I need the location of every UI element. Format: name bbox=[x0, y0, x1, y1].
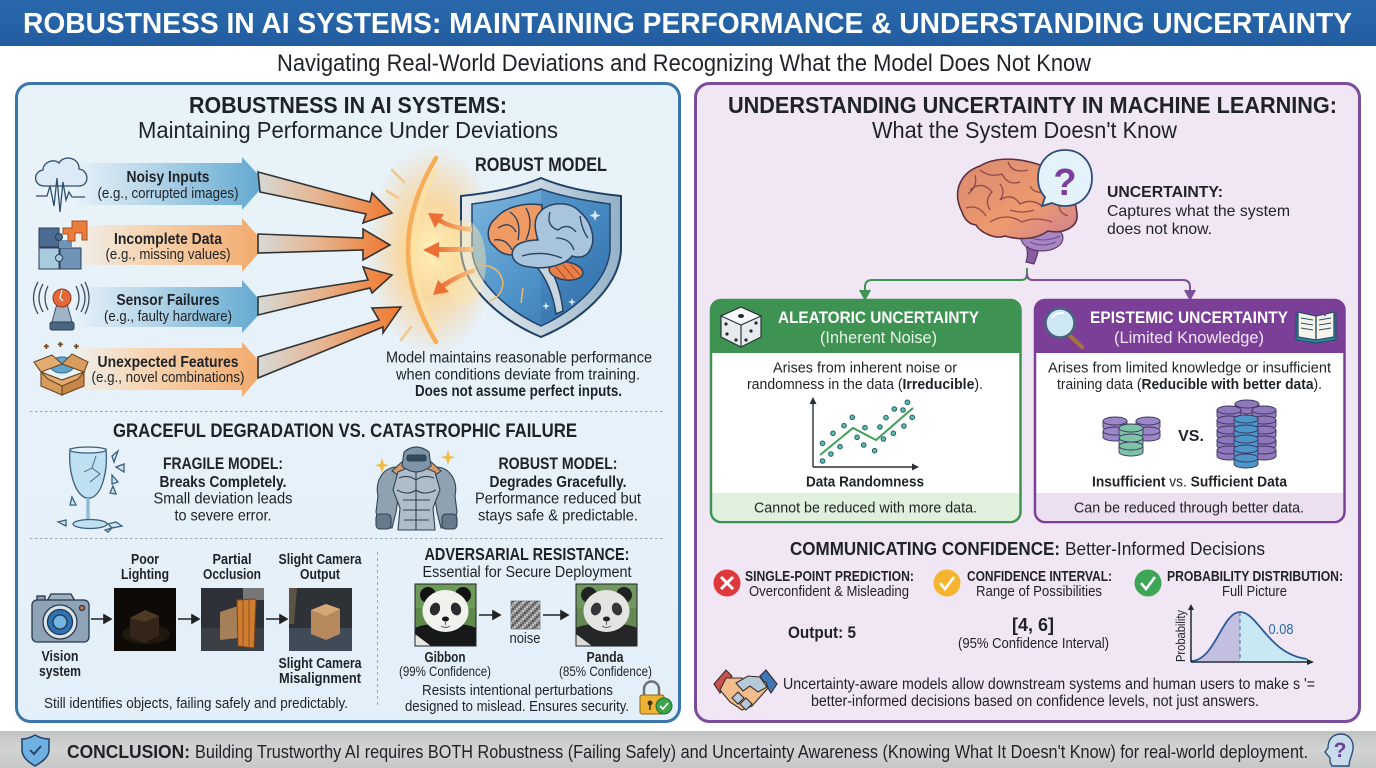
card heading: epistemic: (Limited Knowledge) bbox=[1114, 328, 1264, 347]
text: uncertainty-aware models: Uncertainty-aware models allow downstream systems and human users to make s '= bbox=[783, 676, 1315, 693]
arrow: noisy inputs bbox=[75, 157, 266, 210]
label: vs: VS. bbox=[1178, 428, 1204, 445]
image: poor lighting bbox=[114, 588, 176, 651]
labels: scenario headings: Output bbox=[300, 567, 340, 583]
text: identifies objects: Still identifies objects, failing safely and predictably. bbox=[44, 695, 348, 712]
arrow: unexpected features: Unexpected Features bbox=[98, 354, 238, 371]
glow overlap bbox=[442, 220, 486, 304]
chart: probability distribution bbox=[1173, 604, 1314, 665]
icon: open box: + bbox=[44, 342, 49, 351]
arrow: deviation into shield 2 bbox=[258, 229, 390, 260]
footer: conclusion bbox=[0, 731, 1376, 768]
arrow: deviation into shield 3 bbox=[258, 267, 392, 315]
text: resists perturbations bbox=[405, 683, 629, 715]
icon: dice bbox=[721, 307, 761, 347]
icon: head with question mark: ? bbox=[1334, 739, 1346, 762]
labels: gibbon and panda confidence: Panda bbox=[586, 650, 624, 666]
text: epistemic description: training data (Reducible with better data). bbox=[1057, 376, 1322, 393]
deflected arrows bbox=[423, 213, 523, 303]
icon: camera bbox=[32, 594, 89, 642]
text: aleatoric description: Arises from inherent noise or bbox=[773, 360, 957, 376]
arrow: unexpected features bbox=[75, 342, 266, 397]
labels: gibbon and panda confidence bbox=[399, 650, 652, 679]
arrow: deviation into shield 1 bbox=[258, 172, 392, 223]
arrow: deviation into shield 4 bbox=[258, 307, 401, 378]
arrow: incomplete data bbox=[75, 218, 266, 272]
icon: shield with brain bbox=[442, 178, 621, 337]
text: robust degrades gracefully: ROBUST MODEL: bbox=[498, 454, 618, 473]
labels: scenario headings: Occlusion bbox=[203, 567, 261, 583]
chart caption: insufficient vs sufficient: Insufficient vs. Sufficient Data bbox=[1092, 474, 1288, 490]
arrow: noisy inputs: Noisy Inputs bbox=[126, 169, 210, 186]
labels: scenario headings: Slight Camera bbox=[278, 552, 362, 568]
text: robust degrades gracefully: stays safe & predictable. bbox=[478, 508, 638, 524]
card heading: epistemic bbox=[1090, 308, 1289, 347]
header banner bbox=[0, 0, 1376, 46]
chart caption: data randomness: Data Randomness bbox=[806, 474, 924, 490]
heading: communicating confidence bbox=[790, 539, 1265, 559]
image: noise bbox=[510, 601, 540, 647]
icon: broken wine glass bbox=[58, 447, 124, 532]
icon: faulty sensor bbox=[34, 282, 89, 330]
heading: communicating confidence: COMMUNICATING CONFIDENCE: bbox=[790, 539, 1060, 559]
chart: probability distribution: 0.08 bbox=[1268, 622, 1294, 638]
labels: gibbon and panda confidence: (85% Confidence) bbox=[559, 663, 652, 679]
text: uncertainty definition: Captures what the system bbox=[1107, 203, 1290, 220]
heading: graceful degradation: GRACEFUL DEGRADATION VS. CATASTROPHIC FAILURE bbox=[113, 420, 577, 442]
label: slight camera misalignment: Misalignment bbox=[279, 671, 361, 687]
arrow: incomplete data: (e.g., missing values) bbox=[106, 246, 231, 263]
card heading: aleatoric bbox=[778, 308, 980, 347]
heading: adversarial resistance bbox=[422, 544, 632, 581]
text: uncertainty definition: does not know. bbox=[1107, 221, 1212, 238]
icon: head with question mark bbox=[1325, 734, 1353, 766]
image: partial occlusion bbox=[201, 588, 264, 651]
card heading: aleatoric: ALEATORIC UNCERTAINTY bbox=[778, 308, 980, 327]
text: confidence interval: CONFIDENCE INTERVAL: bbox=[967, 569, 1112, 585]
label: slight camera misalignment: Slight Camera bbox=[278, 656, 362, 672]
image: panda perturbed bbox=[576, 584, 637, 646]
text: robust model description: Does not assume perfect inputs. bbox=[415, 383, 622, 400]
text: fragile model: to severe error. bbox=[174, 508, 272, 524]
branching arrows bbox=[860, 268, 1195, 299]
label: vision system: Vision bbox=[42, 649, 78, 665]
label: slight camera misalignment bbox=[278, 656, 362, 687]
text: resists perturbations: Resists intentional perturbations bbox=[422, 683, 613, 699]
panel heading: robustness: ROBUSTNESS IN AI SYSTEMS: bbox=[189, 92, 507, 118]
text: epistemic description bbox=[1048, 360, 1332, 393]
text: single-point prediction bbox=[745, 569, 914, 600]
labels: gibbon and panda confidence: Gibbon bbox=[424, 650, 466, 666]
heading: communicating confidence: Better-Informed Decisions bbox=[1065, 539, 1265, 559]
card: epistemic uncertainty bbox=[1035, 300, 1344, 522]
label: vision system bbox=[39, 649, 81, 680]
heading: adversarial resistance: ADVERSARIAL RESISTANCE: bbox=[424, 544, 630, 564]
text: single-point prediction: Overconfident & Misleading bbox=[749, 584, 909, 600]
icon: red cross bbox=[714, 570, 740, 596]
text: robust model description bbox=[386, 350, 652, 400]
icon: open box bbox=[34, 340, 88, 395]
text: conclusion: CONCLUSION: bbox=[67, 742, 190, 762]
subtitle: Navigating Real-World Deviations and Recognizing What the Model Does Not Know bbox=[277, 50, 1092, 77]
panel: robustness bbox=[16, 84, 680, 722]
text: fragile model bbox=[154, 454, 292, 524]
divider bbox=[30, 538, 665, 540]
text: fragile model: Small deviation leads bbox=[154, 490, 292, 508]
icon: open box: + bbox=[74, 342, 79, 351]
image: panda original bbox=[415, 584, 476, 646]
icon: open book bbox=[1296, 309, 1336, 343]
chart: probability distribution: Probability bbox=[1173, 610, 1188, 662]
text: probability distribution bbox=[1167, 569, 1343, 600]
arrow: sensor failures bbox=[75, 280, 266, 333]
image: camera misalignment bbox=[289, 588, 352, 651]
text: single-point prediction: SINGLE-POINT PREDICTION: bbox=[745, 569, 914, 585]
divider bbox=[30, 410, 665, 412]
value: confidence interval bbox=[958, 615, 1109, 652]
text: robust degrades gracefully: Degrades Gracefully. bbox=[490, 474, 626, 491]
text: aleatoric description: randomness in the data (Irreducible). bbox=[747, 376, 983, 393]
text: uncertainty-aware models: better-informed decisions based on confidence levels, not just answers. bbox=[811, 693, 1259, 710]
text: confidence interval: Range of Possibilities bbox=[976, 584, 1102, 600]
label: vision system: system bbox=[39, 664, 81, 680]
icon: check shield bbox=[22, 735, 49, 766]
card heading: epistemic: EPISTEMIC UNCERTAINTY bbox=[1090, 308, 1289, 327]
icon: puzzle pieces bbox=[39, 221, 87, 269]
icon: magnifying glass bbox=[1046, 308, 1082, 347]
value: output 5: Output: 5 bbox=[788, 623, 856, 642]
text: fragile model: FRAGILE MODEL: bbox=[163, 454, 283, 473]
text: robust degrades gracefully: Performance reduced but bbox=[475, 490, 642, 508]
panel heading: robustness bbox=[138, 92, 558, 143]
image: noise: noise bbox=[510, 631, 540, 647]
value: confidence interval: (95% Confidence Interval) bbox=[958, 635, 1109, 652]
value: confidence interval: [4, 6] bbox=[1012, 615, 1054, 635]
icon: brain with question bubble bbox=[958, 150, 1092, 264]
card: aleatoric uncertainty bbox=[711, 300, 1020, 522]
card heading: aleatoric: (Inherent Noise) bbox=[820, 328, 937, 347]
icon: green check bbox=[1134, 570, 1162, 596]
panel: uncertainty bbox=[696, 84, 1360, 722]
text: uncertainty definition bbox=[1107, 184, 1290, 238]
icon: cloud with noise wave bbox=[36, 158, 87, 212]
panel heading: uncertainty bbox=[728, 92, 1337, 143]
impact glow bbox=[366, 145, 498, 355]
text: resists perturbations: designed to mislead. Ensures security. bbox=[405, 699, 629, 715]
text: fragile model: Breaks Completely. bbox=[160, 474, 286, 491]
arrow: incomplete data: Incomplete Data bbox=[114, 231, 222, 248]
arrow: sensor failures: Sensor Failures bbox=[116, 292, 220, 309]
icon: amber check bbox=[934, 570, 960, 596]
text: uncertainty definition: UNCERTAINTY: bbox=[1107, 184, 1223, 201]
labels: scenario headings bbox=[121, 552, 362, 583]
icon: padlock with check bbox=[640, 682, 672, 714]
card footer: aleatoric: Cannot be reduced with more data. bbox=[754, 500, 977, 516]
arrow: sensor failures: (e.g., faulty hardware) bbox=[104, 308, 232, 325]
adversarial arrows bbox=[479, 611, 568, 619]
text: uncertainty-aware models bbox=[783, 676, 1315, 710]
text: aleatoric description bbox=[747, 360, 983, 393]
text: robust model description: when conditions deviate from training. bbox=[395, 366, 640, 384]
icon: open box: + bbox=[58, 340, 63, 349]
card footer: epistemic: Can be reduced through better data. bbox=[1074, 500, 1304, 516]
arrow: unexpected features: (e.g., novel combinations) bbox=[92, 369, 244, 386]
labels: gibbon and panda confidence: (99% Confidence) bbox=[399, 663, 491, 679]
title: ROBUSTNESS IN AI SYSTEMS: MAINTAINING PERFORMANCE & UNDERSTANDING UNCERTAINTY bbox=[23, 8, 1352, 40]
text: probability distribution: PROBABILITY DISTRIBUTION: bbox=[1167, 569, 1343, 585]
icon: brain with question bubble: ? bbox=[1053, 162, 1077, 204]
deflection shock wave bbox=[387, 158, 436, 342]
flow arrows bbox=[91, 615, 287, 623]
labels: scenario headings: Lighting bbox=[121, 567, 169, 583]
labels: scenario headings: Poor bbox=[131, 552, 159, 568]
brain in shield bbox=[488, 204, 593, 314]
chart: data randomness scatter bbox=[810, 397, 919, 470]
text: probability distribution: Full Picture bbox=[1222, 584, 1287, 600]
panel heading: uncertainty: UNDERSTANDING UNCERTAINTY IN MACHINE LEARNING: bbox=[728, 92, 1337, 118]
panel heading: robustness: Maintaining Performance Under Deviations bbox=[138, 117, 558, 143]
icon: sufficient data stacks bbox=[1217, 400, 1276, 468]
text: confidence interval bbox=[967, 569, 1112, 600]
icon: insufficient data stacks bbox=[1103, 417, 1160, 456]
text: epistemic description: Arises from limited knowledge or insufficient bbox=[1048, 360, 1332, 376]
text: robust degrades gracefully bbox=[475, 454, 642, 524]
labels: scenario headings: Partial bbox=[212, 552, 252, 568]
text: robust model description: Model maintains reasonable performance bbox=[386, 350, 652, 366]
label: robust model: ROBUST MODEL bbox=[475, 155, 607, 176]
icon: handshake bbox=[714, 670, 777, 710]
heading: adversarial resistance: Essential for Secure Deployment bbox=[422, 564, 632, 581]
panel heading: uncertainty: What the System Doesn't Know bbox=[872, 117, 1177, 143]
icon: armored robot bbox=[375, 447, 457, 530]
arrow: noisy inputs: (e.g., corrupted images) bbox=[98, 185, 238, 202]
